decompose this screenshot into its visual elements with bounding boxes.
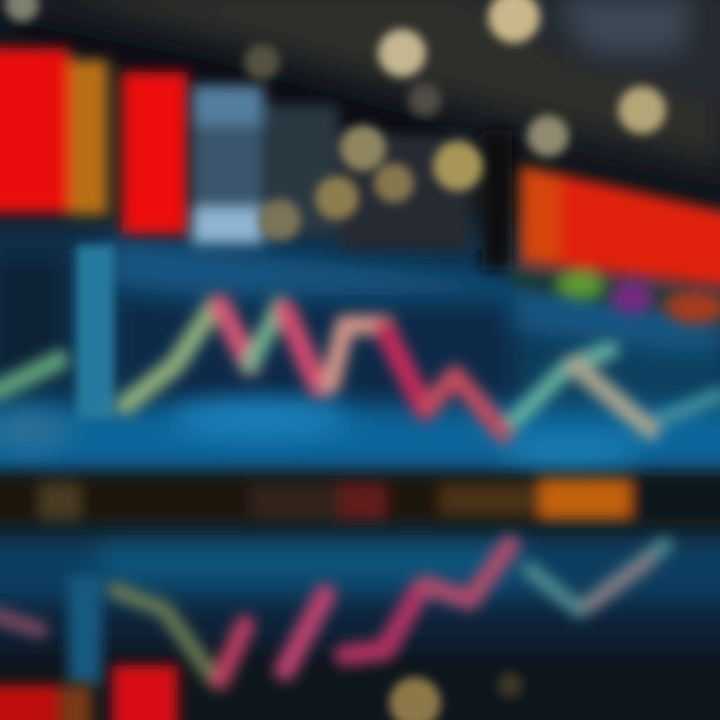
lower red blocks xyxy=(0,665,178,720)
red panel right xyxy=(510,165,720,325)
blue board section xyxy=(0,225,720,475)
dark ticker strip xyxy=(0,476,720,528)
grey blue panels xyxy=(192,85,512,270)
upper zigzag chart line xyxy=(0,305,720,435)
lower pillar xyxy=(68,575,102,685)
vertical blue pillar xyxy=(76,245,114,420)
lower reflected blue section xyxy=(0,535,720,720)
background upper ceiling xyxy=(0,0,720,240)
bright reflections on blue band xyxy=(0,400,640,464)
lower zigzag chart line xyxy=(0,545,665,680)
red price panels left xyxy=(0,48,188,234)
